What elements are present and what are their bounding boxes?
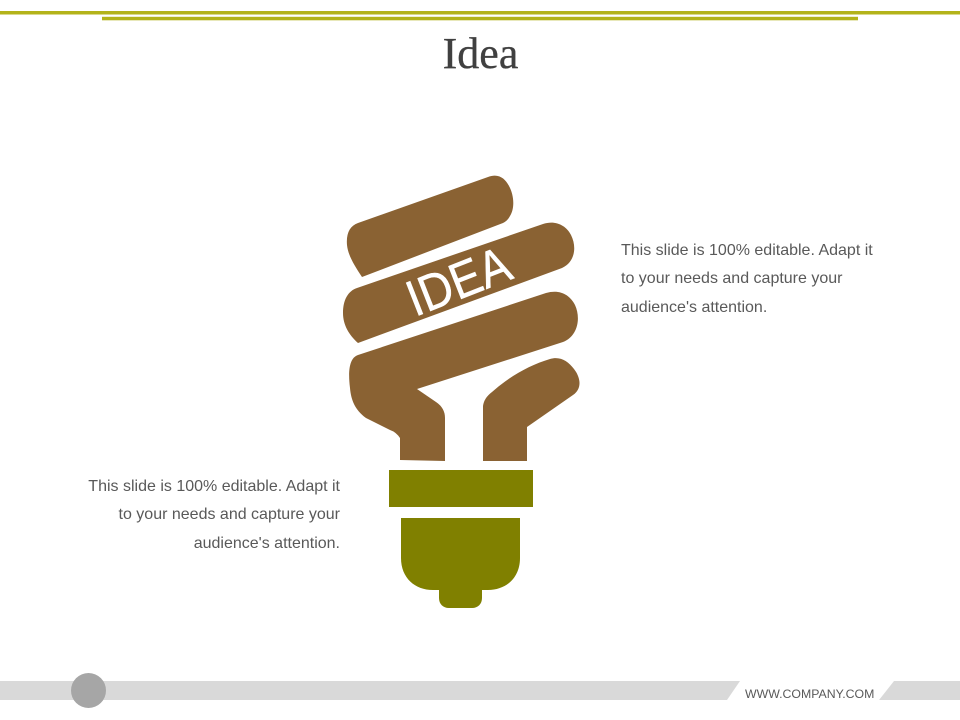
footer circle — [71, 673, 106, 708]
top rules — [0, 11, 960, 20]
bulb collar — [389, 470, 533, 507]
bulb coil top — [347, 176, 513, 277]
text block: left: This slide is 100% editable. Adapt it — [88, 478, 341, 495]
text block: right: audience's attention. — [621, 299, 767, 316]
text block: right: This slide is 100% editable. Adapt it — [621, 242, 873, 259]
bulb base — [401, 518, 520, 608]
text block: right: to your needs and capture your — [621, 270, 843, 287]
title: Idea — [443, 29, 518, 78]
footer bar left — [0, 681, 740, 700]
footer bar right — [879, 681, 960, 700]
footer website: WWW.COMPANY.COM — [745, 687, 874, 701]
icon: light bulb — [343, 176, 580, 608]
bulb right arm — [483, 358, 580, 461]
idea label on coil: IDEA — [399, 236, 520, 328]
text block: left — [88, 478, 341, 552]
text block: left: audience's attention. — [194, 535, 340, 552]
text block: left: to your needs and capture your — [119, 506, 341, 523]
bulb coil middle — [343, 223, 574, 343]
text block: right — [621, 242, 873, 316]
bulb coil lower with left arm — [349, 292, 578, 461]
